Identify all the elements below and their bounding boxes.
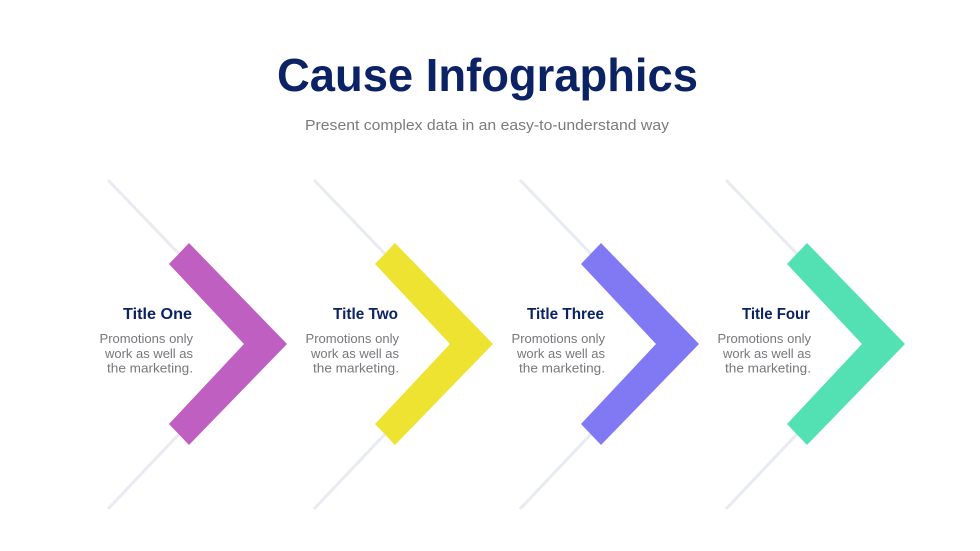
subtitle: Present complex data in an easy-to-understand way <box>305 117 670 134</box>
body three: the marketing. <box>519 360 605 376</box>
body four: Promotions only <box>718 331 811 346</box>
heading two: Title Two <box>333 306 398 323</box>
body two: the marketing. <box>313 360 399 376</box>
body one: Promotions only <box>100 331 193 346</box>
body three: Promotions only <box>512 331 605 346</box>
body one: the marketing. <box>107 360 193 376</box>
body four: the marketing. <box>725 360 811 376</box>
body two: work as well as <box>310 346 399 361</box>
chevron two <box>375 243 493 445</box>
step: Title One <box>100 180 287 509</box>
step: Title Two <box>306 180 493 509</box>
heading three: Title Three <box>527 306 604 323</box>
body four: work as well as <box>722 346 811 361</box>
title: Cause Infographics <box>277 49 698 101</box>
connector lines one <box>108 180 180 509</box>
body two: Promotions only <box>306 331 399 346</box>
connector lines three <box>520 180 592 509</box>
body three: work as well as <box>516 346 605 361</box>
step: Title Four <box>718 180 905 509</box>
connector lines two <box>314 180 386 509</box>
heading one: Title One <box>123 306 192 323</box>
chevron one <box>169 243 287 445</box>
body one: work as well as <box>104 346 193 361</box>
step: Title Three <box>512 180 699 509</box>
chevron four <box>787 243 905 445</box>
chevron three <box>581 243 699 445</box>
heading four: Title Four <box>742 306 810 323</box>
connector lines four <box>726 180 798 509</box>
